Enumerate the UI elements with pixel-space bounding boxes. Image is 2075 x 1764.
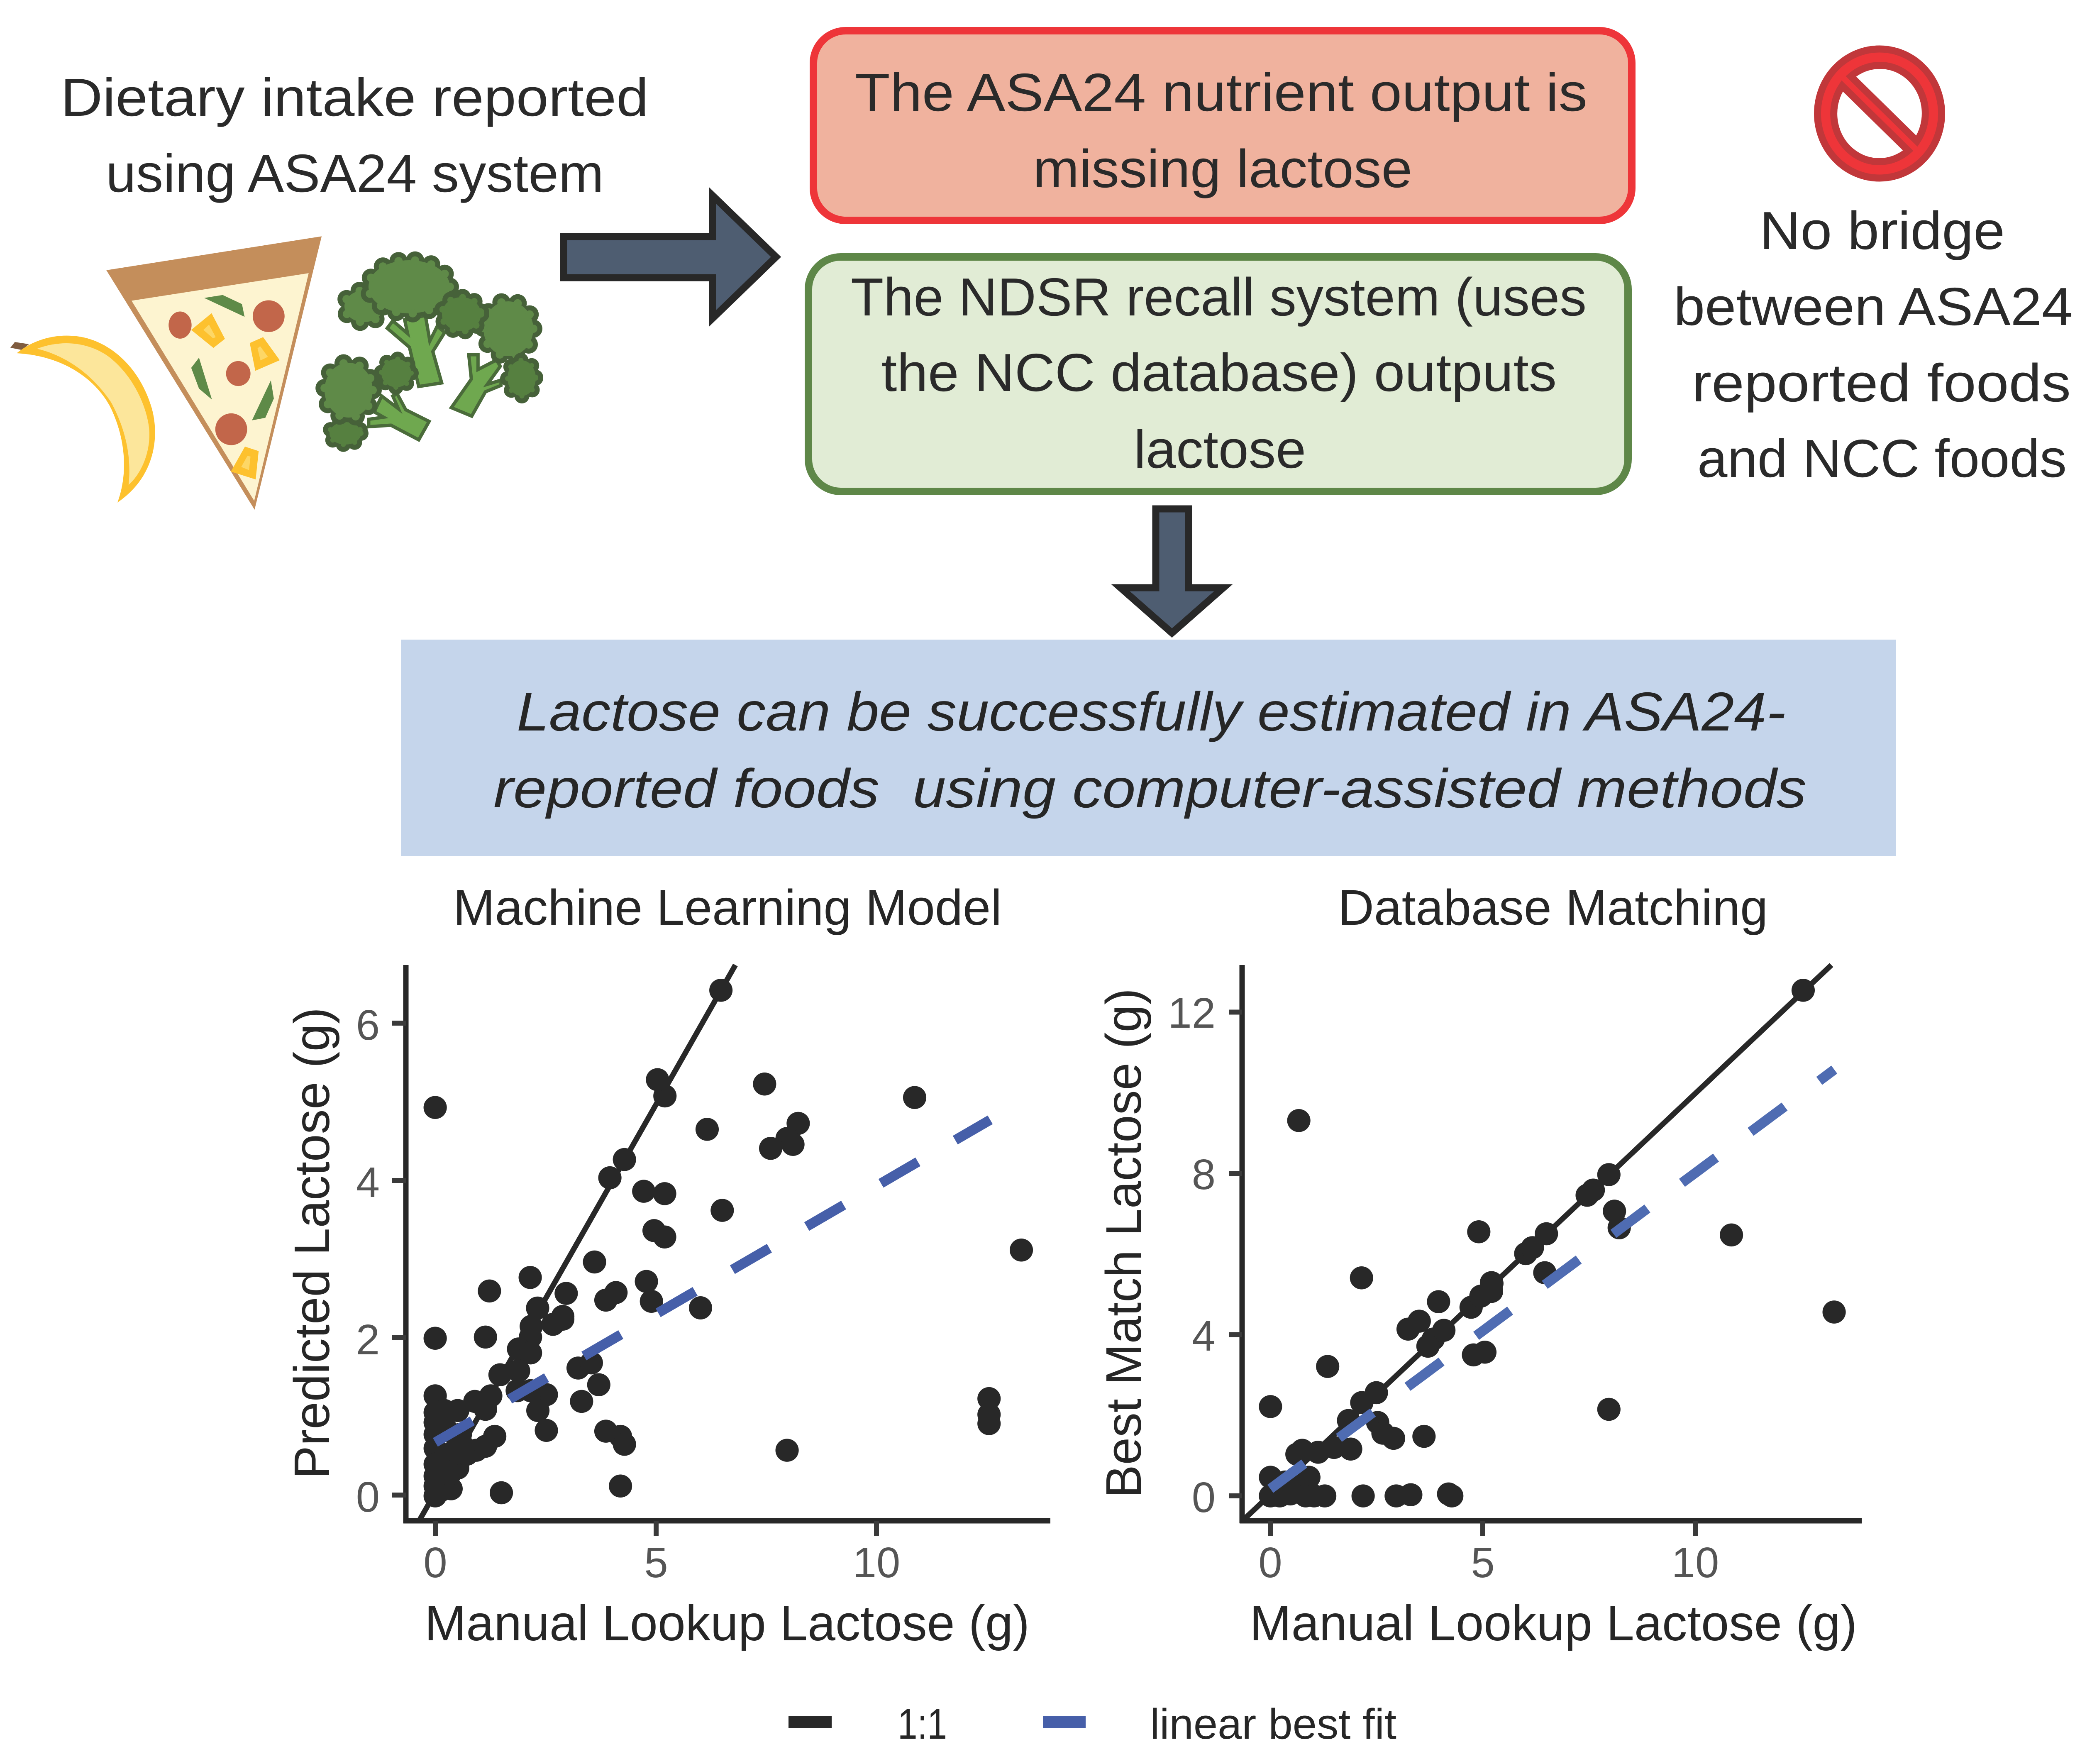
1:1 line (1243, 965, 1831, 1521)
text block: dietary intake: using ASA24 system (106, 144, 604, 203)
panel: ASA24 missing lactose: missing lactose (1033, 139, 1412, 199)
x tick labels (1258, 1539, 1719, 1586)
y axis label: Predicted Lactose (g) (283, 1007, 340, 1479)
y tick labels: 4 (1192, 1312, 1216, 1360)
legend item: linear best fit: linear best fit (1150, 1700, 1396, 1748)
text block: dietary intake: Dietary intake reported (61, 68, 649, 127)
x tick labels (423, 1539, 900, 1586)
y axis label: Best Match Lactose (g) (1095, 988, 1152, 1498)
arrow: right (564, 195, 776, 318)
panel: ASA24 missing lactose (813, 31, 1632, 220)
y tick labels: 0 (1192, 1473, 1216, 1521)
panel: NDSR outputs lactose: The NDSR recall system (uses (851, 267, 1587, 327)
linear best fit line (1270, 1070, 1834, 1489)
text block: no bridge: and NCC foods (1697, 429, 2067, 489)
legend item: 1:1: 1:1 (898, 1700, 947, 1748)
y tick labels (1168, 989, 1216, 1521)
y tick labels: 6 (356, 1001, 380, 1049)
panel: NDSR outputs lactose: lactose (1134, 420, 1306, 479)
linear best fit line (435, 1120, 990, 1442)
x tick labels: 10 (1672, 1539, 1719, 1586)
text block: no bridge: No bridge (1760, 201, 2005, 261)
chart: machine learning model scatter (283, 879, 1050, 1651)
y tick labels: 2 (356, 1316, 380, 1363)
x axis label: Manual Lookup Lactose (g) (425, 1595, 1030, 1651)
chart: database matching scatter (1095, 879, 1862, 1651)
icon: pizza slice (106, 236, 322, 510)
panel: NDSR outputs lactose: the NCC database) outputs (881, 343, 1557, 403)
legend item: 1:1 (788, 1700, 947, 1748)
arrow: down (1120, 509, 1223, 633)
x tick labels: 0 (1258, 1539, 1282, 1586)
scatter point above fit line (689, 1296, 712, 1319)
chart title: Database Matching (1338, 879, 1768, 936)
x tick labels: 10 (853, 1539, 900, 1586)
legend item: linear best fit (1043, 1700, 1396, 1748)
panel: NDSR outputs lactose (808, 257, 1628, 491)
panel: conclusion: reported foods using computer-assisted methods (493, 758, 1806, 819)
scatter points (424, 979, 1033, 1507)
y tick labels: 12 (1168, 989, 1216, 1037)
icon: broccoli (325, 260, 536, 445)
legend (788, 1700, 1396, 1748)
1:1 line (419, 965, 735, 1521)
y tick labels: 0 (356, 1473, 380, 1521)
axes and ticks (392, 965, 1050, 1536)
text block: no bridge: between ASA24- (1674, 277, 2075, 337)
icon: prohibition sign (1818, 49, 1941, 178)
panel: conclusion: Lactose can be successfully estimated in ASA24- (517, 681, 1786, 742)
x tick labels: 5 (1471, 1539, 1495, 1586)
panel: conclusion (401, 640, 1896, 856)
x tick labels: 0 (423, 1539, 447, 1586)
panel: ASA24 missing lactose: The ASA24 nutrient output is (855, 63, 1587, 122)
scatter points (1259, 979, 1846, 1507)
x tick labels: 5 (644, 1539, 668, 1586)
icon: banana (10, 336, 155, 503)
chart title: Machine Learning Model (453, 879, 1002, 936)
x axis label: Manual Lookup Lactose (g) (1250, 1595, 1857, 1651)
y tick labels (356, 1001, 380, 1521)
y tick labels: 8 (1192, 1151, 1216, 1198)
y tick labels: 4 (356, 1158, 380, 1206)
text block: no bridge (1674, 201, 2075, 489)
text block: dietary intake (61, 68, 649, 203)
text block: no bridge: reported foods (1692, 353, 2071, 413)
axes and ticks (1229, 965, 1862, 1536)
